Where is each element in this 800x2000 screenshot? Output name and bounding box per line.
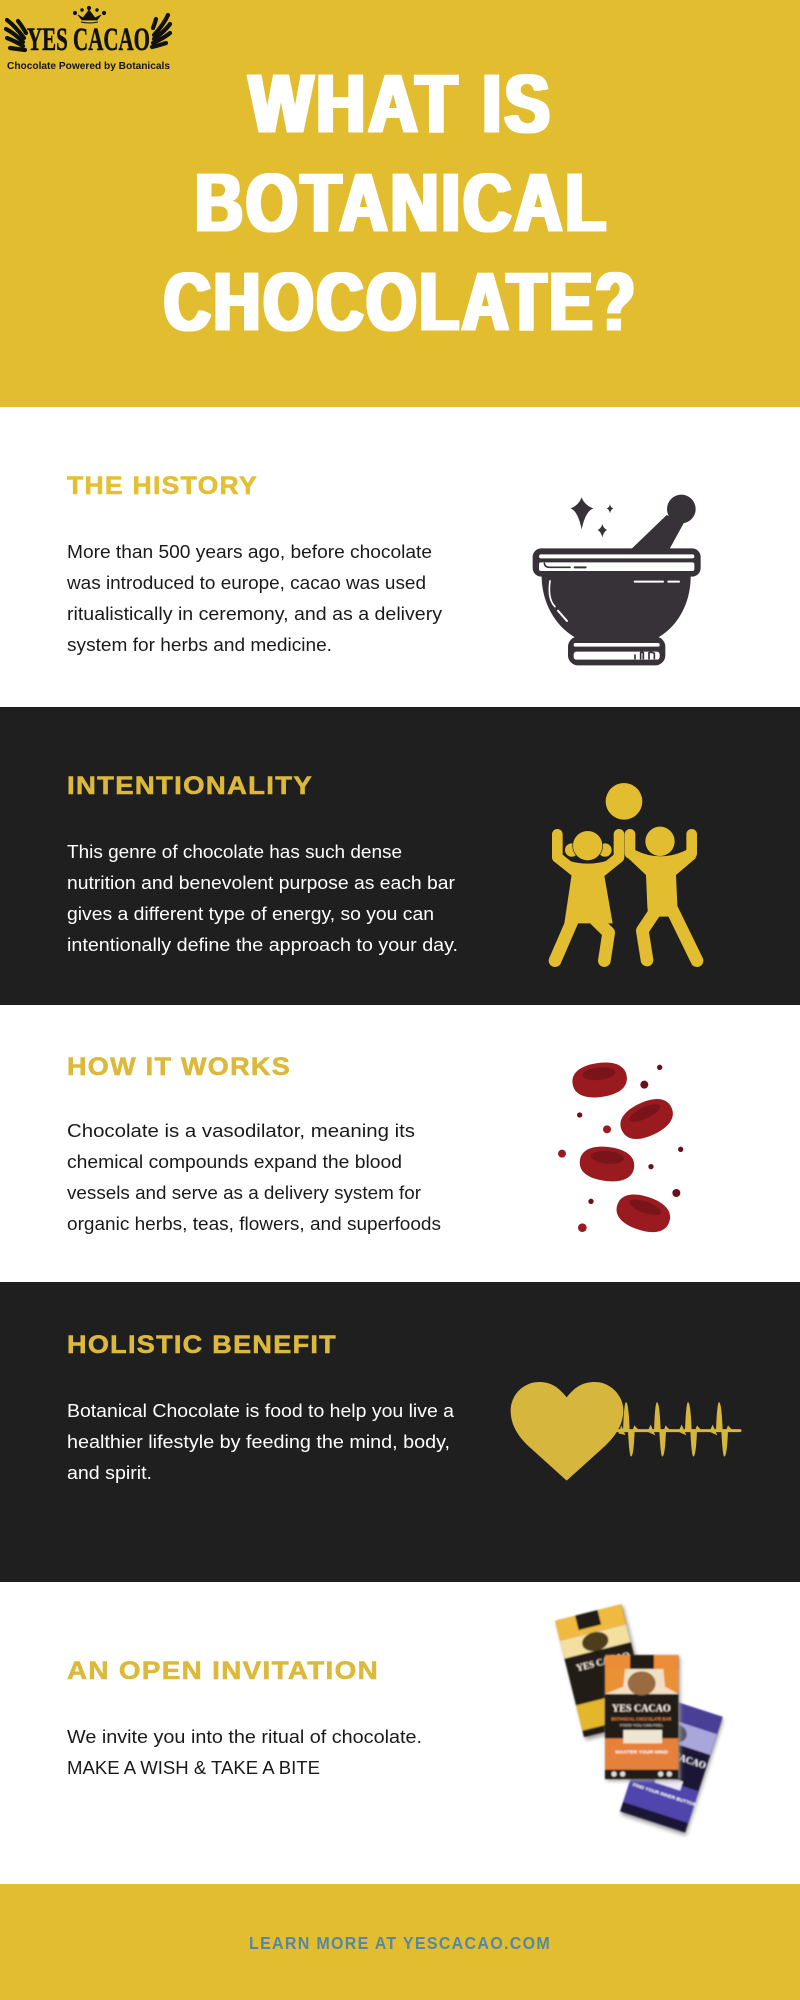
icon: two children playing with ball <box>555 783 697 961</box>
pouch: yellow: YES CACAO <box>576 1651 631 1674</box>
title <box>164 57 638 348</box>
logo wordmark: YES CACAO <box>27 22 150 58</box>
pouch: purple <box>619 1696 725 1836</box>
pouch: orange: BOTANICAL CHOCOLATE BAR <box>611 1717 672 1722</box>
pouch: orange <box>605 1655 680 1781</box>
panel: holistic benefit <box>0 1282 800 1582</box>
title: BOTANICAL <box>195 156 609 249</box>
text: holistic benefit: Botanical Chocolate is food to help you live a <box>67 1401 455 1421</box>
text: holistic benefit: and spirit. <box>67 1463 152 1483</box>
text: how it works: Chocolate is a vasodilator, meaning its <box>67 1121 415 1141</box>
heading: the history: THE HISTORY <box>67 472 258 500</box>
text: intentionality: intentionally define the approach to your day. <box>67 935 458 955</box>
panel: footer <box>0 1884 800 2000</box>
text: holistic benefit <box>67 1401 455 1483</box>
panel: the history <box>0 407 800 707</box>
text: how it works: chemical compounds expand the blood <box>67 1152 402 1172</box>
text: intentionality: This genre of chocolate has such dense <box>67 842 402 862</box>
pouch: purple: FIND YOUR INNER BUTTON <box>632 1782 697 1808</box>
text: holistic benefit: healthier lifestyle by feeding the mind, body, <box>67 1432 450 1452</box>
text: intentionality <box>67 842 458 955</box>
heading: holistic benefit: HOLISTIC BENEFIT <box>67 1331 337 1359</box>
text: how it works: vessels and serve as a delivery system for <box>67 1183 421 1203</box>
panel: intentionality <box>0 707 800 1005</box>
heading: an open invitation: AN OPEN INVITATION <box>67 1657 379 1685</box>
heading: intentionality: INTENTIONALITY <box>67 772 313 800</box>
text: how it works <box>67 1121 441 1234</box>
pouch: orange: FOOD YOU CAN FEEL <box>620 1723 664 1728</box>
pouch: orange: MASTER YOUR MIND <box>615 1749 668 1755</box>
title: CHOCOLATE? <box>164 255 638 348</box>
product photo: chocolate bar pouches <box>555 1604 725 1836</box>
logo <box>6 6 170 72</box>
text: the history <box>66 542 442 655</box>
text: how it works: organic herbs, teas, flowers, and superfoods <box>67 1214 441 1234</box>
text: an open invitation: MAKE A WISH & TAKE A BITE <box>67 1758 320 1778</box>
icon: blood cells <box>558 1059 683 1238</box>
panel: how it works <box>0 1005 800 1282</box>
text: the history: More than 500 years ago, before chocolate <box>67 542 432 562</box>
panel: header <box>0 0 800 407</box>
text: an open invitation: We invite you into the ritual of chocolate. <box>67 1727 422 1747</box>
pouch: orange: YES CACAO <box>612 1704 671 1715</box>
logo tagline: Chocolate Powered by Botanicals <box>7 60 170 72</box>
footer link text: LEARN MORE AT YESCACAO.COM <box>249 1933 551 1953</box>
icon: heart with pulse line <box>511 1382 740 1481</box>
icon: mortar and pestle <box>533 495 701 665</box>
logo wings <box>6 15 170 50</box>
logo crown <box>73 6 106 23</box>
text: an open invitation <box>67 1727 422 1778</box>
heading: how it works: HOW IT WORKS <box>67 1053 291 1081</box>
text: intentionality: gives a different type of energy, so you can <box>67 904 434 924</box>
text: the history: system for herbs and medicine. <box>67 635 332 655</box>
text: the history: was introduced to europe, cacao was used <box>66 573 426 593</box>
text: intentionality: nutrition and benevolent purpose as each bar <box>67 873 455 893</box>
text: the history: ritualistically in ceremony, and as a delivery <box>67 604 442 624</box>
title: WHAT IS <box>249 57 553 150</box>
panel: an open invitation <box>0 1582 800 1884</box>
pouch: purple: YES CACAO <box>652 1745 707 1772</box>
pouch: yellow <box>555 1604 652 1740</box>
